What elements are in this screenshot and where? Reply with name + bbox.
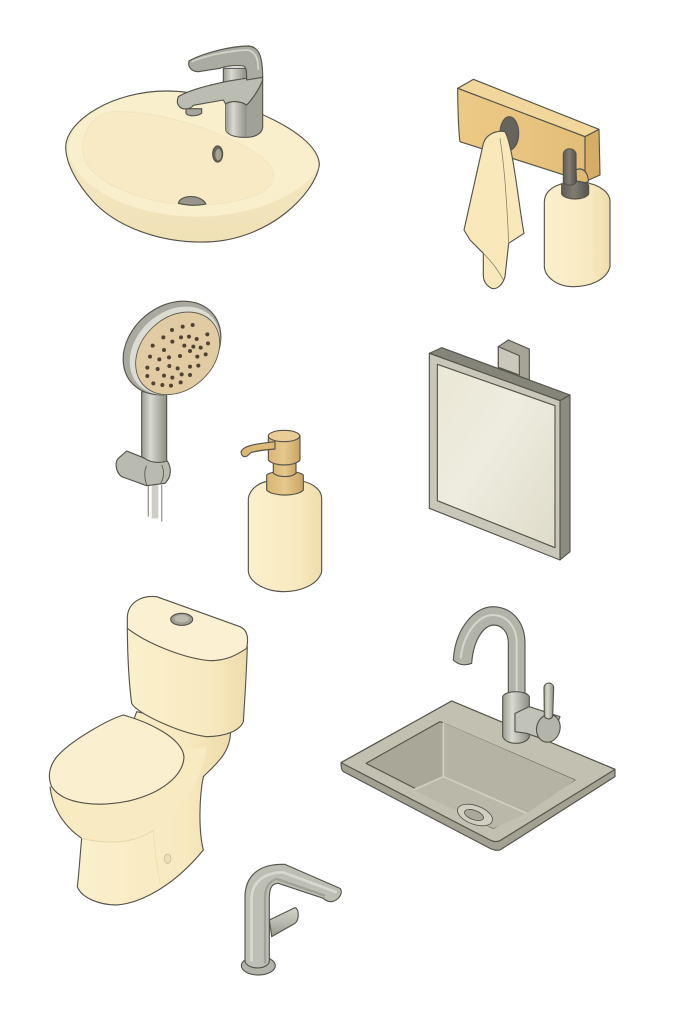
icon: soap dispenser bbox=[241, 430, 322, 592]
icon: wall mirror bbox=[429, 340, 570, 560]
icon: kitchen sink with faucet bbox=[341, 607, 615, 850]
icon: toilet bbox=[49, 596, 248, 905]
icon: freestanding faucet bbox=[241, 864, 341, 975]
icon: wooden rack with towel and dispenser bbox=[458, 79, 610, 289]
icon: washbasin with faucet bbox=[66, 46, 319, 242]
icon: shower head bbox=[104, 282, 240, 522]
